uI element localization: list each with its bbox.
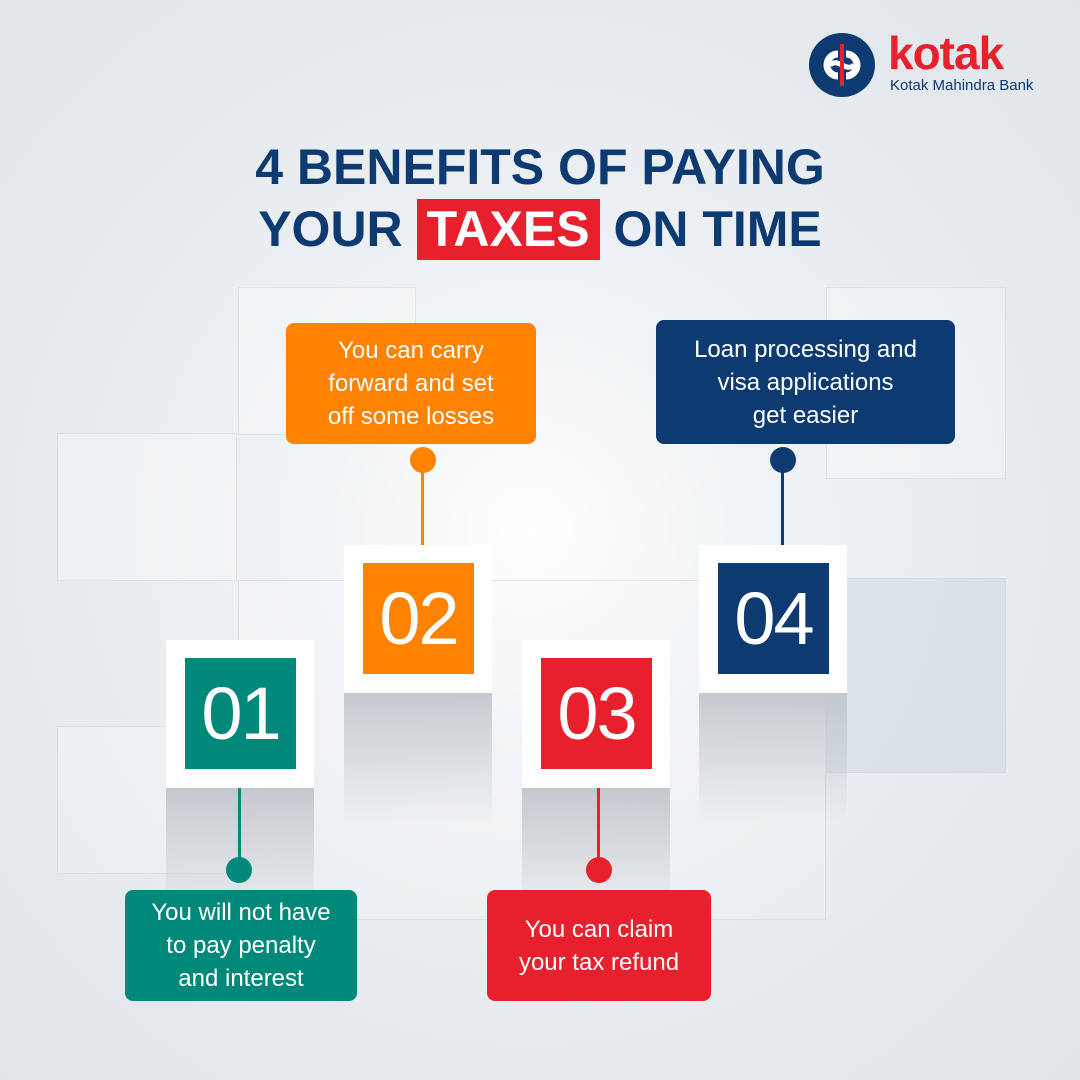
box 03: 03 xyxy=(557,672,636,755)
callout 04: Loan processing and xyxy=(694,336,917,362)
callout 02: off some losses xyxy=(328,403,494,430)
title: YOUR ON TIME xyxy=(258,201,822,257)
callout 02 xyxy=(286,323,536,444)
callout 02: forward and set xyxy=(328,370,494,397)
box 01 xyxy=(166,640,314,788)
callout 01: and interest xyxy=(178,965,304,992)
title: TAXES xyxy=(427,201,590,257)
logo xyxy=(809,27,1034,97)
callout 04: visa applications xyxy=(717,368,894,396)
callout 04: get easier xyxy=(753,402,858,428)
callout 03: your tax refund xyxy=(519,948,679,976)
logo: Kotak Mahindra Bank xyxy=(890,77,1033,94)
callout 01: to pay penalty xyxy=(166,932,316,959)
callout 04 xyxy=(656,320,955,444)
callout 01: You will not have xyxy=(151,899,331,926)
callout 02: You can carry xyxy=(338,337,484,364)
title: 4 BENEFITS OF PAYING xyxy=(255,139,825,195)
box 02: 02 xyxy=(379,577,458,660)
callout 03: You can claim xyxy=(525,916,673,942)
icon: kotak logo xyxy=(809,33,875,97)
box 03 xyxy=(522,640,670,788)
box 01: 01 xyxy=(201,672,280,755)
box 02 xyxy=(344,545,492,693)
box 04 xyxy=(699,545,847,693)
logo: kotak xyxy=(888,27,1003,79)
box 04: 04 xyxy=(734,577,813,660)
title xyxy=(255,139,825,260)
callout 03 xyxy=(487,890,711,1001)
callout 01 xyxy=(125,890,357,1001)
